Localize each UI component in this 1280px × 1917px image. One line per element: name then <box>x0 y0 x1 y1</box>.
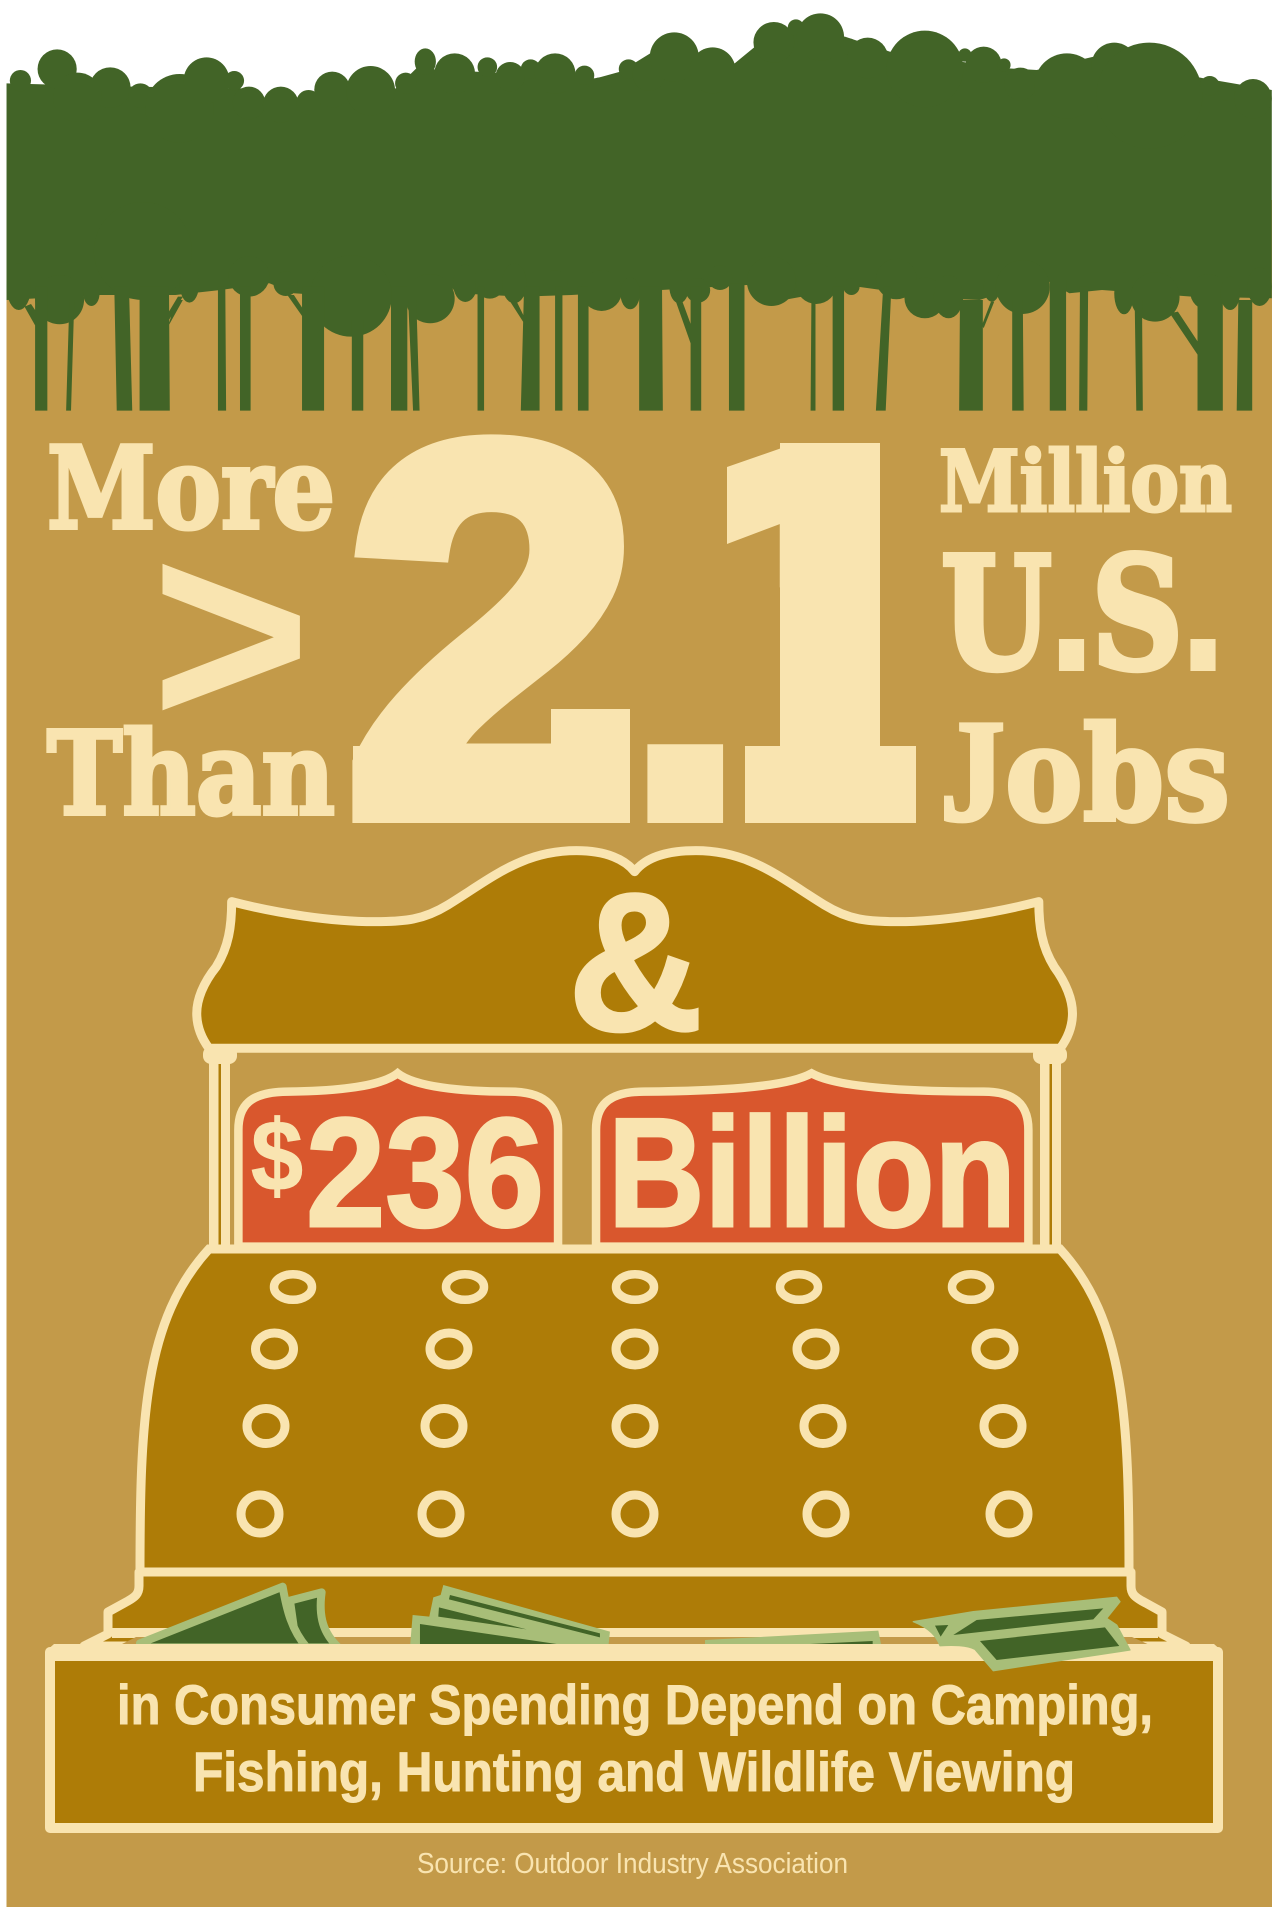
box text line 2: Fishing, Hunting and Wildlife Viewing <box>193 1740 1075 1803</box>
drawer shelf <box>112 1628 1158 1646</box>
cash register <box>45 851 1223 1828</box>
front box <box>45 1644 1223 1828</box>
word: Jobs: Jobs <box>940 690 1230 852</box>
register keys <box>241 1274 1028 1533</box>
left sign: $236 <box>238 1073 558 1259</box>
tree trunks <box>24 280 1252 411</box>
word Billion: Billion <box>608 1086 1016 1259</box>
source line: Source: Outdoor Industry Association <box>417 1848 848 1880</box>
bill right, hanging over box <box>913 1597 1130 1671</box>
headline number and words <box>47 335 1232 932</box>
forest of trees <box>7 13 1272 411</box>
word: More: More <box>47 422 335 555</box>
register columns <box>203 1046 1067 1250</box>
amount dollar sign: $ <box>251 1100 303 1212</box>
register body with dome <box>140 1249 1129 1574</box>
right sign: Billion <box>596 1073 1028 1259</box>
word: Million: Million <box>939 432 1232 531</box>
cash drawer <box>84 1572 1186 1646</box>
money bills left <box>140 1585 610 1647</box>
big digit 1 <box>727 351 916 926</box>
word: Than: Than <box>47 707 335 842</box>
bill stack center-left <box>410 1585 610 1647</box>
bill center <box>705 1631 882 1647</box>
amount 236: 236 <box>306 1086 544 1259</box>
box text line 1: in Consumer Spending Depend on Camping, <box>117 1673 1153 1736</box>
big digit 2: 2 <box>344 335 641 925</box>
big decimal point: . <box>613 357 758 932</box>
greater-than symbol: > <box>151 481 311 785</box>
big digit 1: 1 <box>765 351 915 926</box>
crest panel <box>197 851 1072 1048</box>
word: U.S.: U.S. <box>941 511 1223 706</box>
tree canopy <box>7 13 1272 337</box>
ampersand: & <box>568 852 703 1072</box>
bill pair left <box>140 1587 338 1647</box>
